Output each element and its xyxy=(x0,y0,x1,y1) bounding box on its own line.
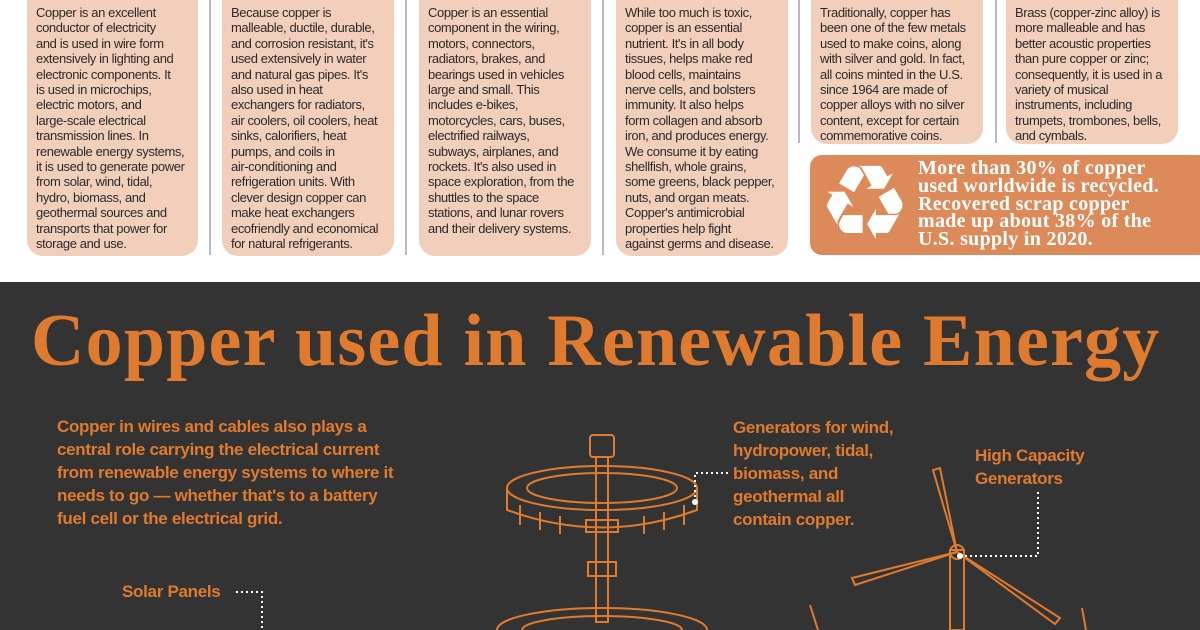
panel: music: and cymbals. xyxy=(1015,128,1087,143)
panel: health: immunity. It also helps xyxy=(625,97,743,112)
panel: health: some greens, black pepper, xyxy=(625,174,774,189)
label: solar panels: Solar Panels xyxy=(122,582,220,601)
panel: health: We consume it by eating xyxy=(625,144,758,159)
panel: plumbing: Because copper is xyxy=(231,5,331,20)
panel: electricity: hydro, biomass, and xyxy=(36,190,145,205)
panel: coins: with silver and gold. In fact, xyxy=(820,51,965,66)
panel: plumbing: and natural gas pipes. It's xyxy=(231,67,368,82)
panel: electricity: large-scale electrical xyxy=(36,113,146,128)
panel: electricity xyxy=(27,0,198,256)
panel: plumbing: also used in heat xyxy=(231,82,322,97)
panel: transportation: stations, and lunar rovers xyxy=(428,205,564,220)
panel: coins: used to make coins, along xyxy=(820,36,961,51)
panel: electricity: Copper is an excellent xyxy=(36,5,156,20)
section: renewable energy xyxy=(0,282,1200,630)
panel: plumbing: for natural refrigerants. xyxy=(231,236,353,251)
panel: health: While too much is toxic, xyxy=(625,5,752,20)
label: generators: hydropower, tidal, xyxy=(733,441,873,460)
panel: plumbing xyxy=(222,0,394,256)
text: recycling fact xyxy=(918,157,1159,250)
label: generators: biomass, and xyxy=(733,464,838,483)
icon: wind turbine xyxy=(810,468,1086,630)
panel: health: nuts, and organ meats. xyxy=(625,190,749,205)
panel: health: form collagen and absorb xyxy=(625,113,762,128)
panel: plumbing: pumps, and coils in xyxy=(231,144,335,159)
panel: health: against germs and disease. xyxy=(625,236,774,251)
arrows: dotted leaders xyxy=(236,473,1038,630)
text: recycling fact: used worldwide is recycled. xyxy=(918,175,1159,197)
title: Copper used in Renewable Energy xyxy=(31,300,1160,382)
callout: recycling xyxy=(810,155,1200,255)
text: recycling fact: U.S. supply in 2020. xyxy=(918,228,1093,250)
panel: transportation: large and small. This xyxy=(428,82,539,97)
panel: music: better acoustic properties xyxy=(1015,36,1151,51)
panel: transportation xyxy=(419,0,591,256)
panel: plumbing: exchangers for radiators, xyxy=(231,97,365,112)
panel: music: consequently, it is used in a xyxy=(1015,67,1162,82)
panel: electricity: from solar, wind, tidal, xyxy=(36,174,152,189)
panel: transportation: and their delivery systems. xyxy=(428,221,571,236)
panel: transportation: electrified railways, xyxy=(428,128,529,143)
label: generators: contain copper. xyxy=(733,510,854,529)
panel: electricity: electric motors, and xyxy=(36,97,141,112)
panel: coins: copper alloys with no silver xyxy=(820,97,964,112)
panel: coins: Traditionally, copper has xyxy=(820,5,950,20)
panel: transportation: motors, connectors, xyxy=(428,36,535,51)
panel: coins: content, except for certain xyxy=(820,113,959,128)
panel: plumbing: sinks, calorifiers, heat xyxy=(231,128,346,143)
text: intro xyxy=(57,417,394,528)
label: generators: geothermal all xyxy=(733,487,844,506)
panel: plumbing: air-conditioning and xyxy=(231,159,336,174)
panel: transportation: space exploration, from the xyxy=(428,174,574,189)
panel: electricity: geothermal sources and xyxy=(36,205,167,220)
text: intro: central role carrying the electrical current xyxy=(57,440,379,459)
panel: plumbing: make heat exchangers xyxy=(231,205,355,220)
panel: music: more malleable and has xyxy=(1015,20,1145,35)
illustration: generator and turbines xyxy=(236,434,1087,630)
label: high capacity: High Capacity xyxy=(975,446,1084,465)
text: recycling fact: More than 30% of copper xyxy=(918,157,1146,179)
panel: electricity: it is used to generate power xyxy=(36,159,185,174)
panel: electricity: electronic components. It xyxy=(36,67,171,82)
panel: plumbing: clever design copper can xyxy=(231,190,366,205)
label: high capacity: Generators xyxy=(975,469,1063,488)
panel: coins: all coins minted in the U.S. xyxy=(820,67,963,82)
panel: health: shellfish, whole grains, xyxy=(625,159,746,174)
panel: electricity: conductor of electricity xyxy=(36,20,156,35)
panel: plumbing: refrigeration units. With xyxy=(231,174,355,189)
panel: health: properties help fight xyxy=(625,221,731,236)
panel: health: iron, and produces energy. xyxy=(625,128,768,143)
text: recycling fact: made up about 38% of the xyxy=(918,210,1151,232)
panel: health: nutrient. It's in all body xyxy=(625,36,744,51)
text: intro: from renewable energy systems to where it xyxy=(57,463,393,482)
panel: electricity: transports that power for xyxy=(36,221,167,236)
panel: plumbing: and corrosion resistant, it's xyxy=(231,36,374,51)
panel: music: than pure copper or zinc; xyxy=(1015,51,1149,66)
panel: transportation: shuttles to the space xyxy=(428,190,539,205)
panel: transportation: Copper is an essential xyxy=(428,5,548,20)
text: intro: Copper in wires and cables also plays a xyxy=(57,417,367,436)
panel: coins: been one of the few metals xyxy=(820,20,966,35)
panel: electricity: is used in microchips, xyxy=(36,82,151,97)
panel: electricity: transmission lines. In xyxy=(36,128,149,143)
icon: generator xyxy=(497,435,707,630)
label: generators: Generators for wind, xyxy=(733,418,893,437)
panel: music xyxy=(1006,0,1178,144)
text: recycling fact: Recovered scrap copper xyxy=(918,193,1130,215)
icon: recycle: ♻ xyxy=(818,142,911,264)
panel: plumbing: malleable, ductile, durable, xyxy=(231,20,374,35)
panel: electricity: storage and use. xyxy=(36,236,126,251)
panel: health: copper is an essential xyxy=(625,20,742,35)
panel: transportation: component in the wiring, xyxy=(428,20,559,35)
label: high capacity xyxy=(975,446,1085,488)
panel: electricity: extensively in lighting and xyxy=(36,51,173,66)
panel: health: nerve cells, and bolsters xyxy=(625,82,755,97)
panel: plumbing: used extensively in water xyxy=(231,51,366,66)
panel: transportation: motorcycles, cars, buses, xyxy=(428,113,565,128)
panel: health: blood cells, maintains xyxy=(625,67,740,82)
panel: coins xyxy=(811,0,983,144)
panel: music: instruments, including xyxy=(1015,97,1132,112)
panel: music: Brass (copper-zinc alloy) is xyxy=(1015,5,1160,20)
text: intro: fuel cell or the electrical grid. xyxy=(57,509,282,528)
panel: music: trumpets, trombones, bells, xyxy=(1015,113,1161,128)
panel: music: variety of musical xyxy=(1015,82,1108,97)
panel: electricity: and is used in wire form xyxy=(36,36,164,51)
panel: transportation: subways, airplanes, and xyxy=(428,144,558,159)
panel: electricity: renewable energy systems, xyxy=(36,144,184,159)
panel: coins: since 1964 are made of xyxy=(820,82,947,97)
panel: plumbing: air coolers, oil coolers, heat xyxy=(231,113,377,128)
panel: transportation: includes e-bikes, xyxy=(428,97,518,112)
panel: plumbing: ecofriendly and economical xyxy=(231,221,378,236)
panel: health xyxy=(616,0,788,256)
panel: coins: commemorative coins. xyxy=(820,128,942,143)
panel: transportation: rockets. It's also used in xyxy=(428,159,556,174)
panel: health: tissues, helps make red xyxy=(625,51,752,66)
label: generators xyxy=(733,418,893,529)
panel: transportation: bearings used in vehicles xyxy=(428,67,564,82)
panel: health: Copper's antimicrobial xyxy=(625,205,744,220)
panel: transportation: radiators, brakes, and xyxy=(428,51,545,66)
text: intro: needs to go — whether that's to a battery xyxy=(57,486,377,505)
